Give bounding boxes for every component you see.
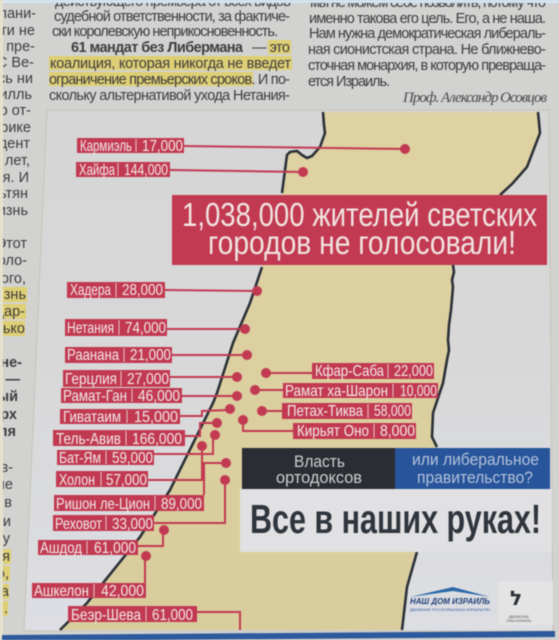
city label: Петах-Тиква: 58,000 — [374, 403, 411, 420]
city label: Кармиэль: 17,000 — [142, 138, 183, 155]
city label: Нетания: Нетания — [67, 320, 114, 337]
city label: Холон: 57,000 — [106, 472, 147, 489]
city label: Гиватаим: 15,000 — [134, 409, 178, 426]
city label: Нетания — [65, 319, 250, 337]
text block: middle column: 61 мандат без Либермана — [71, 40, 244, 56]
city label: Хадера: 28,000 — [122, 282, 163, 299]
city label: Кфар-Саба — [261, 363, 434, 380]
city label: Рамат-Ган: Рамат-Ган — [63, 388, 127, 405]
panel: slogan — [240, 489, 552, 552]
city label: Хадера — [67, 282, 262, 299]
text block: left column fragment: рх — [0, 407, 17, 423]
panel: или либеральное правительство — [395, 448, 550, 489]
panel: Власть ортодоксов: ортодоксов — [276, 468, 362, 487]
text block: right column: ется Израиль. — [308, 74, 390, 90]
text block: left column fragment: . — [4, 601, 8, 617]
text block: left column fragment: а — [1, 584, 10, 600]
text block: middle column: — это — [252, 40, 290, 56]
city label: Нетания: 74,000 — [125, 320, 166, 337]
city label: Рамат-Ган — [61, 388, 242, 405]
city label: Ашкелон: Ашкелон — [34, 583, 89, 600]
city label: Раанана — [65, 347, 252, 364]
logo: letter lamed box: ДВИЖЕНИЕ — [509, 615, 530, 619]
city label: Ришон ле-Цион: Ришон ле-Цион — [56, 496, 150, 513]
city label: Петах-Тиква — [257, 403, 412, 420]
text block: left column fragment: у — [3, 531, 11, 547]
callout: red headline banner — [172, 195, 547, 265]
text block: middle column: коалиция, которая никогда не введет — [50, 56, 291, 72]
text block: left column fragment: в- — [0, 460, 13, 476]
text block: right column: сточная монархия, в которую превраща- — [308, 58, 546, 74]
top edge strip — [0, 0, 559, 3]
city label: Рамат ха-Шарон: Рамат ха-Шарон — [285, 383, 388, 400]
author signature: Проф. Александр Осовцов — [402, 90, 547, 106]
city label: Кирьят Оно: 8,000 — [380, 423, 415, 440]
city label: Хадера: Хадера — [70, 282, 111, 299]
text block: left column fragment: — — [6, 372, 20, 388]
city label: Хайфа: Хайфа — [79, 162, 115, 179]
text block: left column fragment — [0, 6, 36, 617]
city label: Рамат ха-Шарон: 10,000 — [400, 383, 437, 400]
city label: Петах-Тиква: Петах-Тиква — [287, 403, 363, 420]
city label: Беэр-Шева: 61,000 — [152, 607, 193, 624]
text block: middle column: ски королевскую неприкосновенность. — [52, 24, 278, 40]
text block: right column: ная сионистская страна. Не ближнево- — [308, 42, 546, 58]
text block: middle column — [49, 0, 291, 104]
city label: Ришон ле-Цион — [54, 458, 231, 513]
city label: Рамат-Ган: 46,000 — [138, 388, 180, 405]
city label: Тель-Авив: 166,000 — [132, 431, 182, 448]
city label: Ришон ле-Цион: 89,000 — [161, 496, 202, 513]
city label: Раанана: Раанана — [67, 347, 119, 364]
city label: Беэр-Шева: Беэр-Шева — [71, 607, 141, 624]
text block: right column: именно такова его цель. Его, а не наша. — [309, 11, 546, 27]
text block: left column fragment: ого, — [1, 271, 26, 287]
panel: Власть ортодоксов: Власть — [294, 452, 345, 471]
text block: left column fragment: пани- — [0, 6, 36, 22]
city label: Герцлия: 27,000 — [127, 371, 169, 388]
city label: Хайфа — [76, 162, 308, 179]
map: land with coastline and border — [60, 112, 540, 630]
city label: Беэр-Шева — [68, 606, 240, 630]
city label: Кфар-Саба: 22,000 — [394, 363, 433, 380]
logo: Наш дом Израиль: ДВИЖЕНИЕ РУССКОЯЗЫЧНЫХ ИЗРАИЛЬТЯН — [410, 607, 490, 612]
city label: Холон: Холон — [59, 472, 95, 489]
callout: red headline banner: городов не голосовали! — [208, 224, 516, 261]
city label: Ашкелон: 42,000 — [101, 583, 144, 600]
city label: Бат-Ям: 59,000 — [112, 450, 153, 467]
city label: Реховот — [53, 475, 230, 533]
logo: letter lamed box: НАШ ИЗРАИЛЬ — [506, 619, 532, 623]
logo: letter lamed box: ל — [510, 586, 522, 610]
text block: right column: Нам нужна демократическая либераль- — [309, 26, 546, 42]
text block: middle column: ограничение премьерских сроков. И по- — [49, 72, 290, 88]
city label: Хайфа: 144,000 — [124, 162, 168, 179]
city label: Бат-Ям: Бат-Ям — [59, 450, 101, 467]
city label: Тель-Авив: Тель-Авив — [56, 431, 121, 448]
city label: Ашдод — [38, 525, 169, 557]
text block: left column fragment: ти не — [0, 23, 35, 39]
text block: left column fragment: пре- — [6, 39, 35, 55]
city label: Реховот: Реховот — [55, 516, 103, 533]
text block: middle column: судебной ответственности, за фактиче- — [54, 9, 290, 25]
city label: Холон — [56, 441, 207, 489]
city label: Реховот: 33,000 — [112, 516, 153, 533]
panel: Власть ортодоксов — [242, 448, 395, 489]
city label: Раанана: 21,000 — [130, 347, 171, 364]
panel: map background — [24, 110, 553, 631]
city label: Гиватаим — [60, 404, 235, 426]
city label: Кармиэль — [77, 138, 410, 155]
text block: left column fragment: я. И — [3, 170, 29, 186]
city label: Кфар-Саба: Кфар-Саба — [315, 363, 384, 380]
panel: или либеральное правительство: правительство? — [417, 468, 533, 487]
panel: или либеральное правительство: или либеральное — [412, 450, 539, 469]
city label: Тель-Авив — [53, 418, 222, 448]
city label: Ашдод: 61,000 — [94, 540, 136, 557]
city label: Гиватаим: Гиватаим — [63, 409, 121, 426]
text block: left column fragment: лет, — [5, 153, 30, 169]
text block: left column fragment: в — [4, 495, 12, 511]
logo: Наш дом Израиль — [410, 587, 490, 612]
left edge strip — [0, 0, 3, 640]
city label: Ашдод: Ашдод — [40, 540, 83, 557]
logo: Наш дом Израиль: НАШ ДОМ ИЗРАИЛЬ — [410, 597, 490, 606]
city label: Рамат ха-Шарон — [250, 383, 438, 400]
text block: right column — [308, 0, 546, 90]
city label: Герцлия — [63, 370, 242, 388]
text block: left column fragment: я — [2, 549, 10, 565]
bottom blue rule — [2, 631, 555, 640]
city label: Кирьят Оно: Кирьят Оно — [297, 423, 369, 440]
text block: middle column: скольку альтернативой ухода Нетания- — [49, 88, 290, 104]
city label: Кирьят Оно — [238, 415, 416, 440]
city label: Кармиэль: Кармиэль — [80, 138, 132, 155]
logo: letter lamed box — [498, 581, 553, 625]
city label: Ашкелон — [32, 551, 151, 600]
highlights: yellow marker — [3, 40, 292, 616]
city label: Герцлия: Герцлия — [65, 371, 117, 388]
text block: left column fragment: не- — [0, 355, 22, 371]
city label: Бат-Ям — [57, 430, 220, 467]
